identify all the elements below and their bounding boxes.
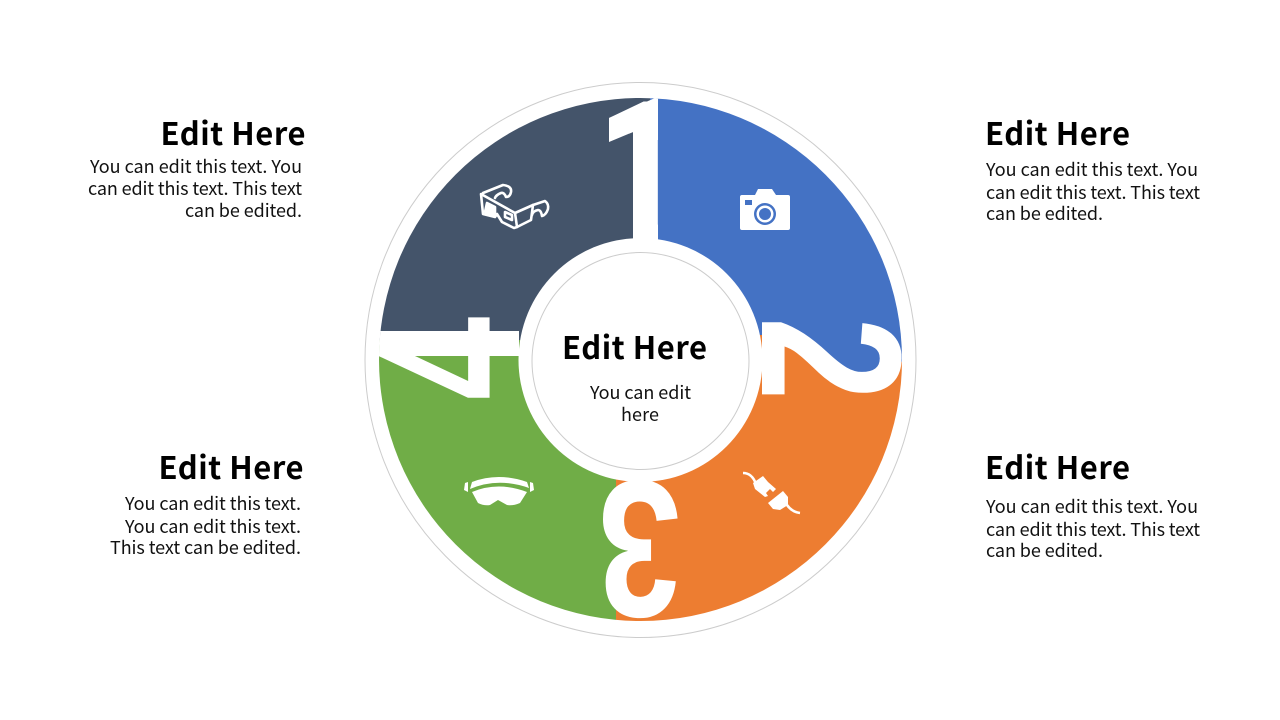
heading: Edit Here	[985, 443, 1130, 488]
numeral 1: 1	[580, 57, 697, 291]
body: can be edited.	[986, 200, 1103, 226]
body: You can edit this text. You	[985, 493, 1198, 519]
numeral 4	[379, 317, 519, 398]
heading: Edit Here	[158, 443, 304, 488]
numeral 1	[609, 98, 658, 240]
body	[985, 493, 1200, 563]
icon: camera	[740, 189, 790, 230]
icon: plug and socket	[743, 473, 800, 513]
heading: Edit Here	[985, 109, 1130, 154]
center white ring	[518, 238, 762, 482]
icon: VR goggles	[464, 477, 534, 505]
cycle wheel	[379, 98, 902, 621]
body: can be edited.	[185, 197, 302, 223]
text block: top right	[985, 109, 1200, 226]
body: You can edit	[589, 379, 691, 405]
center circle outline	[532, 252, 749, 470]
text block: top left	[88, 109, 306, 223]
body: can edit this text. This text	[986, 179, 1200, 205]
heading: Edit Here	[562, 323, 707, 368]
numeral 2: 2	[719, 317, 942, 400]
body	[589, 379, 691, 427]
numeral 3: 3	[598, 441, 681, 658]
body: can edit this text. This text	[986, 516, 1200, 542]
body: This text can be edited.	[110, 534, 301, 560]
body: can edit this text. This text	[88, 175, 302, 201]
body: You can edit this text. You	[985, 156, 1198, 182]
body: here	[621, 401, 659, 427]
heading: Edit Here	[160, 109, 306, 154]
segment 2: blue	[650, 98, 902, 372]
body: You can edit this text.	[124, 513, 301, 539]
body: can be edited.	[986, 537, 1103, 563]
body	[985, 156, 1200, 226]
outer ring outline	[365, 82, 916, 638]
text block: bottom right	[985, 443, 1200, 563]
numeral 4: 4	[329, 317, 564, 400]
body: You can edit this text. You	[89, 153, 302, 179]
text block: center	[562, 323, 707, 427]
segment 4: green	[379, 340, 628, 620]
segment 1: navy	[370, 90, 650, 340]
icon: 3D glasses	[481, 185, 548, 228]
text block: bottom left	[110, 443, 304, 560]
body	[88, 153, 302, 223]
body: You can edit this text.	[124, 490, 301, 516]
segment 3: orange	[616, 335, 910, 630]
body	[110, 490, 301, 560]
